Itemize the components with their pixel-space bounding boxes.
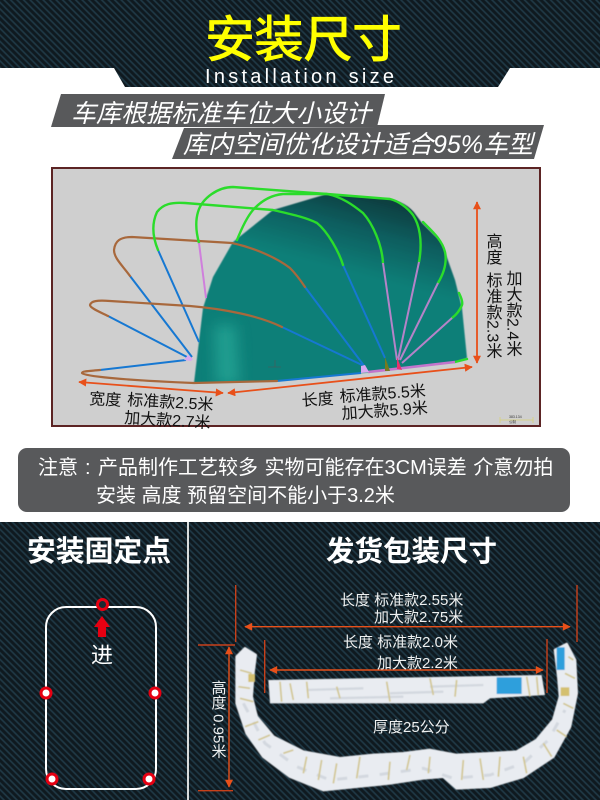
base outline bbox=[46, 607, 156, 789]
outer length label: 加大款2.75米 bbox=[374, 609, 463, 626]
length label: 加大款5.9米 bbox=[341, 399, 428, 423]
U-shaped package bbox=[237, 644, 577, 790]
mounting point markers bbox=[41, 600, 160, 784]
height label: 高度 0.95米 bbox=[210, 680, 226, 759]
inner length label: 加大款2.2米 bbox=[377, 655, 458, 672]
width label: 宽度 bbox=[89, 390, 122, 410]
divider bbox=[187, 522, 189, 800]
note panel: : bbox=[85, 457, 91, 479]
height arrow bbox=[476, 202, 478, 363]
width arrow bbox=[79, 382, 223, 393]
pink support wires bbox=[199, 243, 455, 372]
green hoops bbox=[153, 187, 467, 362]
note panel: 产品制作工艺较多 实物可能存在3CM误差 介意勿拍 bbox=[98, 456, 553, 479]
note panel: 注意 bbox=[38, 456, 78, 479]
note panel bbox=[18, 448, 570, 512]
height label: 高度 bbox=[484, 233, 502, 265]
outer length label bbox=[340, 592, 463, 626]
outer length label: 长度 标准款2.55米 bbox=[340, 592, 463, 609]
panel: mounting points bbox=[27, 536, 171, 789]
panel: packaging size bbox=[198, 536, 577, 791]
length label bbox=[301, 382, 428, 423]
length label: 长度 bbox=[301, 390, 334, 410]
banner: second line: 库内空间优化设计适合95%车型 bbox=[183, 131, 536, 159]
blue support wires bbox=[100, 250, 385, 381]
subtitle: Installation size bbox=[205, 66, 394, 88]
scale mark: 383.134 bbox=[509, 415, 522, 419]
length label: 标准款5.5米 bbox=[339, 382, 426, 406]
entry arrow bbox=[94, 616, 110, 637]
axis triad bbox=[268, 360, 281, 367]
length arrow bbox=[228, 367, 472, 393]
height label bbox=[484, 233, 522, 358]
inner length label: 长度 标准款2.0米 bbox=[343, 634, 458, 651]
heading: 发货包装尺寸 bbox=[326, 536, 497, 568]
scale mark: 公制 bbox=[509, 419, 516, 424]
thickness label: 厚度25公分 bbox=[373, 719, 450, 736]
hinge brackets bbox=[184, 355, 402, 373]
lower dark background bbox=[0, 522, 600, 800]
note panel: 安装 高度 预留空间不能小于3.2米 bbox=[96, 484, 395, 507]
straight package bbox=[268, 675, 545, 703]
width label: 标准款2.5米 bbox=[127, 391, 214, 414]
entry label: 进 bbox=[91, 643, 113, 668]
height label: 标准款2.3米 bbox=[484, 272, 502, 358]
panel: 3D garage diagram bbox=[52, 168, 540, 432]
dimension lines bbox=[198, 585, 577, 791]
banner: first line: 车库根据标准车位大小设计 bbox=[71, 100, 374, 128]
heading: 安装固定点 bbox=[27, 536, 171, 568]
scale mark bbox=[500, 415, 533, 424]
width label: 加大款2.7米 bbox=[124, 409, 211, 432]
title: 安装尺寸 bbox=[205, 12, 402, 68]
inner length label bbox=[343, 634, 458, 672]
brown hoops bbox=[82, 237, 305, 383]
height label: 加大款2.4米 bbox=[504, 270, 522, 356]
header band bbox=[0, 0, 600, 87]
dome cover bbox=[194, 194, 467, 385]
width label bbox=[89, 390, 214, 432]
